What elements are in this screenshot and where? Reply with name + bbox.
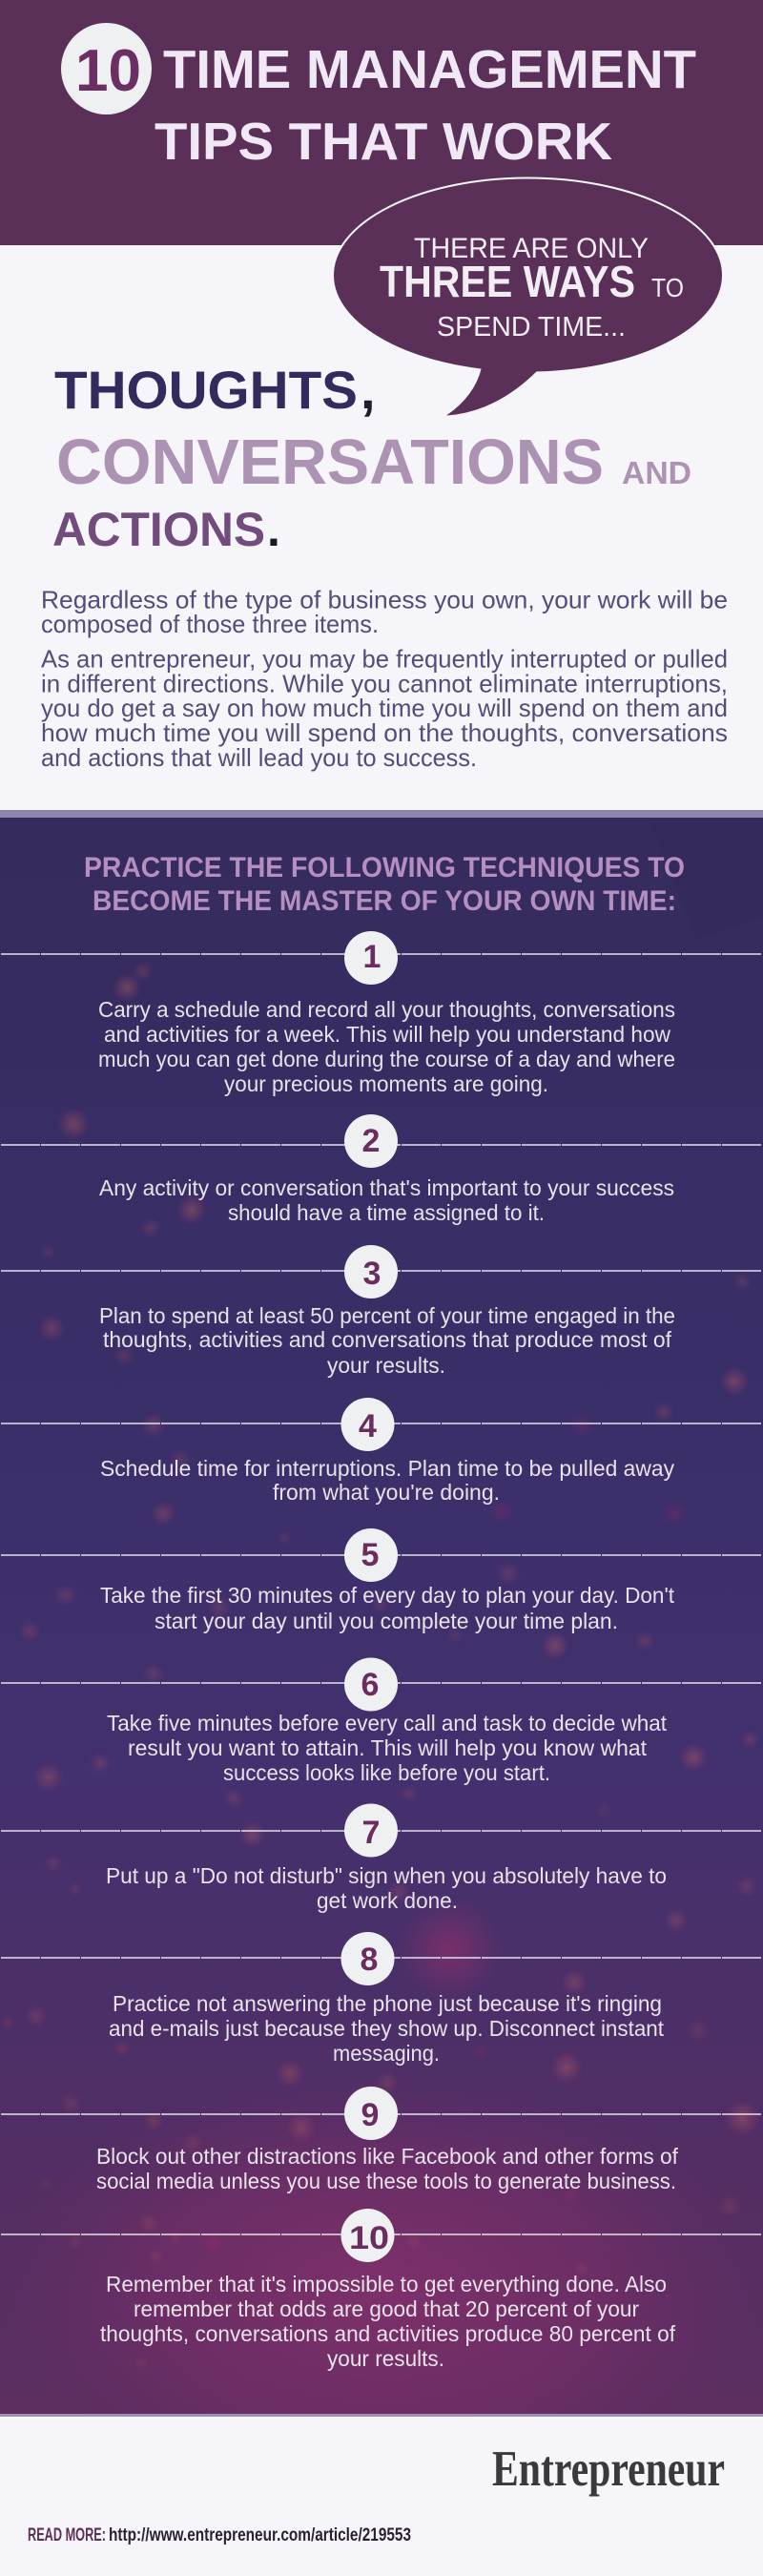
tip 10: remember that odds are good that 20 percent of your: [134, 2296, 639, 2321]
tip 6: [1, 1658, 761, 1785]
heading: thoughts, conversations and actions: ACTIONS: [52, 503, 265, 556]
tip 8: and e-mails just because they show up. Disconnect instant: [109, 2016, 665, 2041]
heading: thoughts, conversations and actions: [52, 360, 691, 556]
tip 3: Plan to spend at least 50 percent of your time engaged in the: [99, 1303, 675, 1328]
heading: thoughts, conversations and actions: .: [267, 503, 280, 556]
tip 7: 7: [362, 1815, 380, 1851]
tip 4: 4: [359, 1408, 377, 1444]
heading: thoughts, conversations and actions: AND: [622, 455, 691, 490]
tip 9: Block out other distractions like Facebook and other forms of: [96, 2144, 679, 2169]
tip 9: 9: [361, 2097, 379, 2133]
text block: introduction: you do get a say on how much time you will spend on them and: [41, 694, 728, 722]
heading: practice the following techniques: PRACTICE THE FOLLOWING TECHNIQUES TO: [84, 852, 685, 883]
heading: thoughts, conversations and actions: THOUGHTS: [54, 360, 358, 420]
title: TIPS THAT WORK: [155, 112, 612, 171]
tip 1: [1, 931, 761, 1096]
tip 7: Put up a "Do not disturb" sign when you absolutely have to: [106, 1863, 667, 1888]
title: [155, 39, 696, 171]
heading: practice the following techniques: BECOME THE MASTER OF YOUR OWN TIME:: [93, 885, 676, 917]
tip 7: [1, 1803, 761, 1913]
tip 4: Schedule time for interruptions. Plan time to be pulled away: [100, 1456, 674, 1481]
tip 10: Remember that it's impossible to get everything done. Also: [106, 2272, 667, 2296]
tip 1: much you can get done during the course of a day and where: [98, 1047, 675, 1071]
tip 5: Take the first 30 minutes of every day to plan your day. Don't: [100, 1583, 675, 1608]
tip 2: 2: [362, 1123, 380, 1159]
callout: speech bubble: TO: [651, 273, 684, 302]
tip 3: 3: [363, 1256, 381, 1292]
callout: speech bubble: SPEND TIME...: [437, 312, 626, 343]
text block: introduction: and actions that will lead you to success.: [41, 743, 477, 772]
text block: introduction: composed of those three items.: [41, 610, 379, 638]
tip 3: [1, 1245, 761, 1378]
tip 1: your precious moments are going.: [224, 1071, 548, 1096]
icon: number 10 badge: 10: [75, 38, 141, 104]
tip 9: social media unless you use these tools to generate business.: [96, 2169, 676, 2193]
heading: practice the following techniques: [84, 852, 685, 917]
callout: speech bubble: THREE WAYS: [380, 257, 635, 306]
tip 6: success looks like before you start.: [223, 1760, 550, 1785]
tip 1: 1: [363, 939, 381, 975]
tip 1: and activities for a week. This will help you understand how: [104, 1022, 670, 1047]
tip 8: 8: [361, 1942, 378, 1978]
divider: footer band: [0, 2414, 763, 2417]
tip 4: [1, 1398, 761, 1505]
tip 5: start your day until you complete your time plan.: [155, 1609, 618, 1633]
tip 8: Practice not answering the phone just because it's ringing: [113, 1991, 662, 2016]
panel: techniques background: [0, 810, 763, 2509]
tip 2: should have a time assigned to it.: [228, 1200, 545, 1225]
tip 2: Any activity or conversation that's important to your success: [99, 1175, 674, 1200]
tip 7: get work done.: [317, 1888, 458, 1913]
text block: introduction: in different directions. While you cannot eliminate interruptions,: [41, 670, 728, 698]
tip 5: 5: [361, 1537, 379, 1573]
tip 10: [1, 2209, 761, 2371]
icon: number 10 badge: [61, 23, 152, 114]
text block: introduction: [41, 586, 728, 772]
tip 6: 6: [361, 1667, 379, 1703]
tip 8: [1, 1932, 761, 2066]
tip 4: from what you're doing.: [273, 1480, 500, 1505]
tip 6: result you want to attain. This will help you know what: [128, 1735, 648, 1760]
text block: introduction: how much time you will spend on the thoughts, conversations: [41, 718, 728, 747]
tip 5: [1, 1528, 761, 1633]
tip 10: 10: [349, 2220, 389, 2256]
callout: speech bubble: [333, 177, 723, 416]
heading: thoughts, conversations and actions: ,: [361, 360, 376, 420]
tip 3: your results.: [327, 1353, 445, 1378]
source link: read more: [28, 2525, 411, 2545]
tip 3: thoughts, activities and conversations that produce most of: [103, 1327, 672, 1352]
title: TIME MANAGEMENT: [163, 39, 696, 100]
heading: thoughts, conversations and actions: CONVERSATIONS: [56, 426, 604, 498]
tip 1: Carry a schedule and record all your thoughts, conversations: [98, 997, 675, 1022]
tip 10: thoughts, conversations and activities produce 80 percent of: [100, 2321, 676, 2346]
tip 9: [1, 2087, 761, 2193]
tip 2: [1, 1114, 761, 1225]
tip 10: your results.: [327, 2346, 444, 2371]
source link: read more: http://www.entrepreneur.com/article/219553: [109, 2525, 411, 2545]
callout: speech bubble: THERE ARE ONLY: [414, 233, 649, 264]
text block: introduction: Regardless of the type of business you own, your work will be: [41, 586, 728, 614]
tip 8: messaging.: [333, 2041, 440, 2066]
text block: introduction: As an entrepreneur, you may be frequently interrupted or pulled: [41, 645, 728, 674]
panel: header banner: [0, 0, 763, 245]
source link: read more: READ MORE:: [28, 2525, 106, 2545]
tip 6: Take five minutes before every call and task to decide what: [107, 1711, 668, 1735]
